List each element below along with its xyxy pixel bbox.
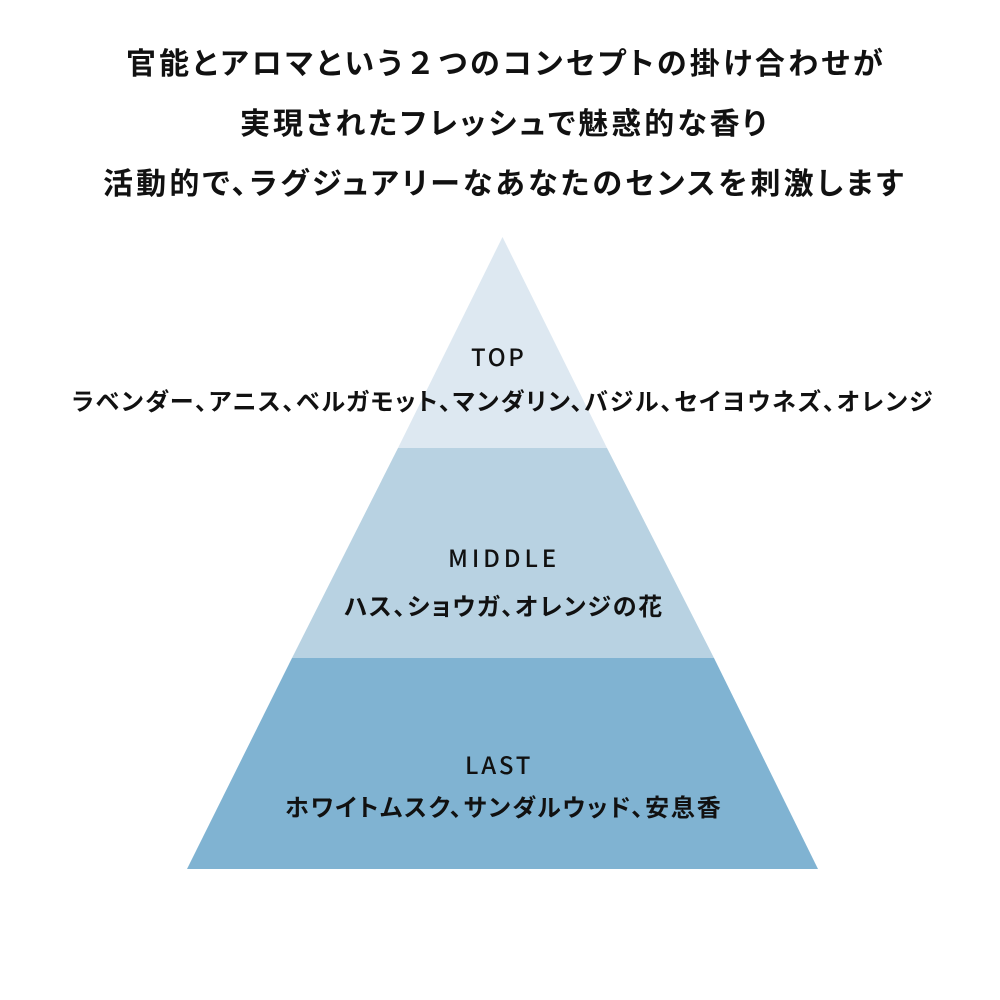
ingredients: LAST: ホワイトムスク、サンダルウッド、安息香 xyxy=(285,795,723,822)
pyramid tier: middle xyxy=(292,448,714,658)
label: LAST: LAST xyxy=(465,746,533,781)
title line 3: 活動的で、ラグジュアリーなあなたのセンスを刺激します xyxy=(103,168,906,201)
title xyxy=(103,48,906,201)
pyramid tier: last xyxy=(187,658,818,869)
pyramid tier: top xyxy=(398,237,607,448)
title line 1: 官能とアロマという２つのコンセプトの掛け合わせが xyxy=(126,48,886,81)
pyramid chart xyxy=(187,238,818,869)
ingredients: MIDDLE: ハス、ショウガ、オレンジの花 xyxy=(344,594,664,621)
ingredients: TOP: ラベンダー、アニス、ベルガモット、マンダリン、バジル、セイヨウネズ、オレンジ xyxy=(72,389,934,416)
label: MIDDLE: MIDDLE xyxy=(448,539,560,574)
title line 2: 実現されたフレッシュで魅惑的な香り xyxy=(240,108,769,141)
label: TOP: TOP xyxy=(471,338,526,373)
